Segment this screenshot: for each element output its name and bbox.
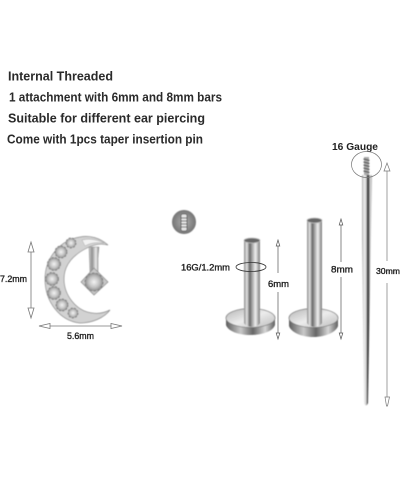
arrow: moon width bbox=[39, 324, 122, 328]
label: 7.2mm: 7.2mm bbox=[0, 274, 27, 285]
tapered shaft bbox=[362, 175, 372, 406]
stem bbox=[89, 247, 99, 272]
threaded tip bbox=[364, 157, 369, 175]
icon: crescent moon earring bbox=[45, 236, 110, 323]
arrow: moon height bbox=[28, 242, 34, 318]
label: 5.6mm: 5.6mm bbox=[67, 331, 94, 342]
label: 16 Gauge: 16 Gauge bbox=[332, 141, 378, 153]
base disc bbox=[289, 318, 338, 337]
feature line: attachment: 1 attachment with 6mm and 8mm bars bbox=[9, 90, 222, 104]
icon: thread detail circle bbox=[172, 210, 196, 234]
shaft bbox=[307, 221, 322, 327]
crescent body bbox=[45, 236, 110, 323]
shaft opening bbox=[307, 218, 322, 223]
icon: 8mm labret bar bbox=[289, 218, 338, 337]
icon: 6mm labret bar bbox=[226, 238, 275, 335]
text block: product features bbox=[7, 70, 222, 146]
diamond centre stone bbox=[85, 273, 103, 291]
arrow: 30mm bbox=[384, 163, 390, 406]
label: 30mm: 30mm bbox=[376, 267, 400, 276]
ring marker: thread bbox=[352, 152, 382, 178]
icon: taper insertion pin bbox=[362, 157, 372, 406]
gem row bbox=[46, 238, 78, 318]
label: 6mm: 6mm bbox=[268, 279, 289, 290]
base disc bbox=[226, 318, 275, 335]
ring marker: gauge bbox=[236, 262, 266, 272]
label: 8mm: 8mm bbox=[331, 264, 353, 276]
arrow: 8mm bbox=[339, 219, 343, 339]
feature line: ear piercing: Suitable for different ear piercing bbox=[8, 112, 205, 126]
feature line: internal threaded: Internal Threaded bbox=[8, 70, 113, 84]
arrow: 6mm bbox=[276, 240, 280, 339]
feature line: taper pin: Come with 1pcs taper insertion pin bbox=[7, 132, 203, 146]
dangling diamond bbox=[81, 268, 108, 295]
label: 16G/1.2mm: 16G/1.2mm bbox=[181, 262, 230, 274]
shaft bbox=[244, 241, 260, 327]
shaft opening bbox=[244, 238, 260, 243]
polished tip highlight bbox=[82, 239, 104, 246]
